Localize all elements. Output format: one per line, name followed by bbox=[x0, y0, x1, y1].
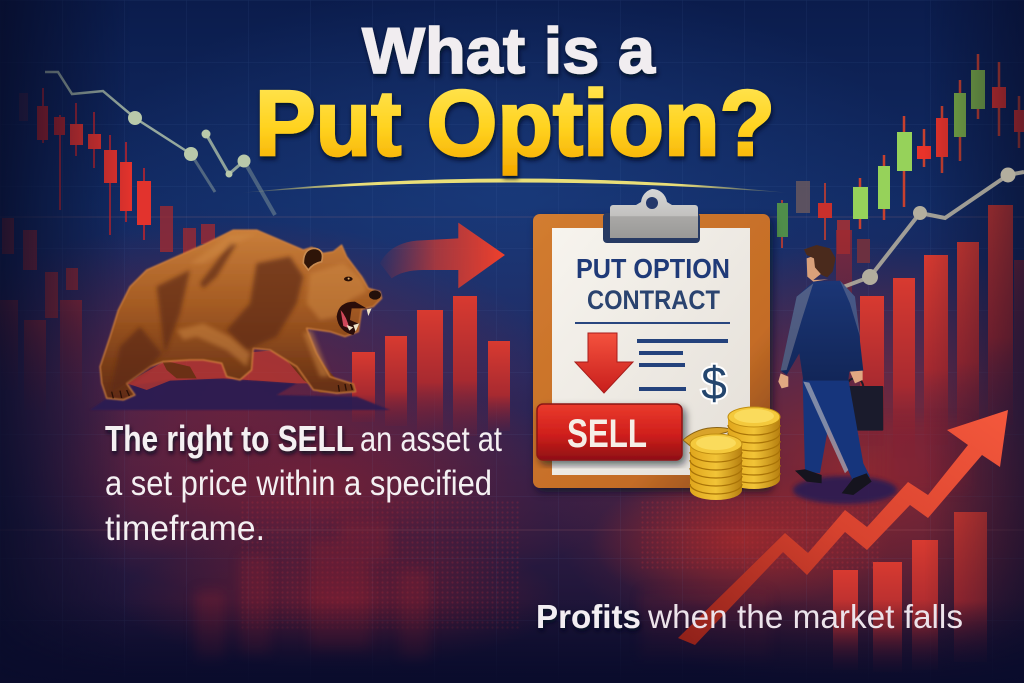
background: falling trend line bbox=[45, 72, 275, 215]
title line 1: What is a bbox=[362, 14, 656, 87]
figure: businessman bbox=[778, 245, 883, 495]
icon: bear bbox=[100, 230, 382, 400]
background: rising candlesticks bbox=[777, 54, 1024, 263]
bear fur highlights bbox=[177, 233, 367, 377]
background: falling candlesticks bbox=[2, 88, 215, 318]
bear mouth bbox=[337, 302, 372, 335]
jacket highlight bbox=[781, 283, 813, 371]
title bbox=[255, 14, 775, 175]
jacket bbox=[781, 281, 863, 381]
head bbox=[807, 256, 828, 282]
hands bbox=[778, 371, 863, 388]
description bold lead: The right to SELL bbox=[105, 418, 354, 459]
arrow: bear to contract bbox=[380, 223, 505, 288]
contract heading: PUT OPTION bbox=[576, 253, 730, 284]
contract lines bbox=[637, 339, 728, 391]
shoes bbox=[795, 469, 872, 495]
heading rule bbox=[575, 322, 730, 324]
caption bold word: Profits bbox=[536, 598, 641, 635]
bear eye and nose bbox=[344, 277, 381, 300]
icon: front coin stack bbox=[690, 434, 742, 500]
panel: clipboard contract: CONTRACT bbox=[587, 285, 720, 315]
sell button bbox=[537, 404, 682, 460]
trousers bbox=[803, 379, 870, 482]
panel: clipboard contract bbox=[533, 189, 780, 500]
background: rising trend line bbox=[835, 168, 1024, 290]
description text bbox=[105, 418, 502, 548]
description line 3: timeframe. bbox=[105, 509, 265, 548]
bear paws bbox=[112, 384, 352, 398]
floor shadow under businessman bbox=[793, 476, 897, 504]
bear fur shading bbox=[110, 243, 303, 393]
clip bbox=[603, 189, 700, 243]
icon: down arrow bbox=[575, 333, 633, 393]
briefcase bbox=[835, 378, 883, 431]
caption remainder: when the market falls bbox=[647, 598, 963, 635]
hair bbox=[804, 245, 836, 277]
icon: dollar sign: $ bbox=[701, 357, 727, 409]
title line 2: Put Option? bbox=[255, 71, 775, 175]
bear ear bbox=[303, 248, 322, 270]
ground shadow under bear bbox=[90, 350, 390, 410]
arrow: rising profit bbox=[678, 410, 1008, 645]
icon: back coin stack bbox=[728, 407, 780, 489]
paper sheet bbox=[552, 228, 750, 475]
decorative arc under title bbox=[240, 178, 790, 193]
bear far legs bbox=[162, 330, 356, 393]
description line 1: an asset at bbox=[360, 420, 502, 459]
caption: profits bbox=[536, 598, 963, 635]
clipboard board bbox=[533, 214, 770, 488]
trouser highlight bbox=[803, 382, 848, 473]
gold ribbon bbox=[683, 428, 735, 450]
description line 2: a set price within a specified bbox=[105, 464, 492, 503]
background: red bar charts bbox=[0, 205, 1024, 672]
sell button: SELL bbox=[567, 412, 647, 456]
bear body bbox=[100, 230, 382, 400]
